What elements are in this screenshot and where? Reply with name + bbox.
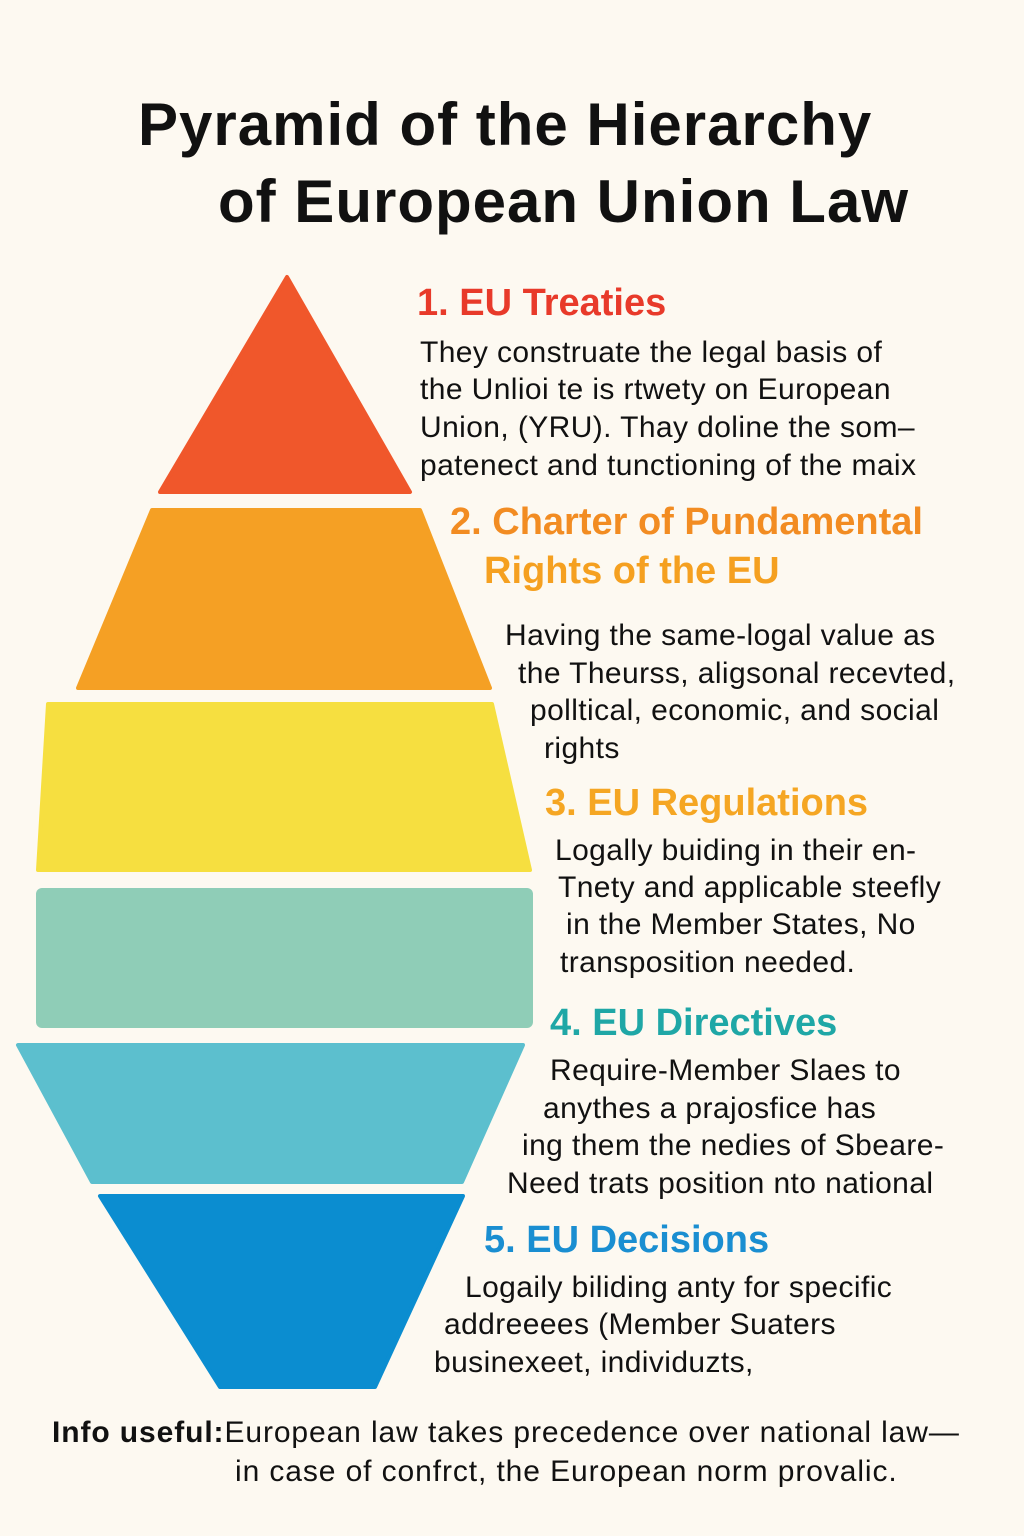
layer 3: Regulations (38, 704, 530, 870)
block 3: Regulations: 3. EU Regulations (545, 782, 868, 824)
layer 4 (36, 888, 533, 1028)
block 5: Decisions: Logaily biliding anty for specific (465, 1271, 892, 1304)
block 4: Directives: anythes a prajosfice has (543, 1092, 876, 1125)
block 1: EU Treaties: the Unlioi te is rtwety on European (420, 373, 891, 406)
layer 6: Decisions (100, 1196, 463, 1387)
footer note: Info useful:European law takes precedence over national law— (52, 1416, 960, 1449)
block 4: Directives (507, 1002, 944, 1200)
footer note: in case of confrct, the European norm provalic. (235, 1455, 898, 1488)
block 2: Charter: rights (544, 732, 620, 765)
block 1: EU Treaties: Union, (YRU). Thay doline the som– (420, 411, 915, 444)
title (138, 91, 909, 235)
block 1: EU Treaties: patenect and tunctioning of the maix (420, 449, 916, 482)
block 5: Decisions: 5. EU Decisions (484, 1219, 769, 1261)
block 3: Regulations: in the Member States, No (566, 908, 916, 941)
layer 5: Directives (18, 1045, 523, 1182)
layer 1: EU Treaties (160, 277, 410, 492)
footer note (52, 1416, 960, 1488)
block 2: Charter (450, 501, 956, 765)
block 2: Charter: Rights of the EU (484, 550, 780, 592)
layer 2: Charter (78, 510, 490, 688)
title: of European Union Law (218, 168, 909, 235)
block 4: Directives: ing them the nedies of Sbeare- (522, 1129, 944, 1162)
block 1: EU Treaties: 1. EU Treaties (417, 282, 666, 324)
block 5: Decisions: addreeees (Member Suaters (444, 1308, 836, 1341)
block 1: EU Treaties (417, 282, 916, 482)
block 2: Charter: the Theurss, aligsonal recevted, (518, 657, 956, 690)
block 5: Decisions: businexeet, individuzts, (434, 1346, 754, 1379)
title: Pyramid of the Hierarchy (138, 91, 872, 158)
block 5: Decisions (434, 1219, 892, 1379)
block 3: Regulations: Logally buiding in their en- (555, 834, 916, 867)
block 4: Directives: Need trats position nto national (507, 1167, 933, 1200)
block 2: Charter: 2. Charter of Pundamental (450, 501, 923, 543)
block 4: Directives: 4. EU Directives (550, 1002, 837, 1044)
block 2: Charter: Having the same-logal value as (505, 619, 936, 652)
block 2: Charter: polltical, economic, and social (530, 694, 939, 727)
block 3: Regulations (545, 782, 941, 979)
block 3: Regulations: Tnety and applicable steefly (558, 871, 941, 904)
block 1: EU Treaties: They construate the legal basis of (420, 336, 882, 369)
block 3: Regulations: transposition needed. (560, 946, 855, 979)
block 4: Directives: Require-Member Slaes to (550, 1054, 901, 1087)
